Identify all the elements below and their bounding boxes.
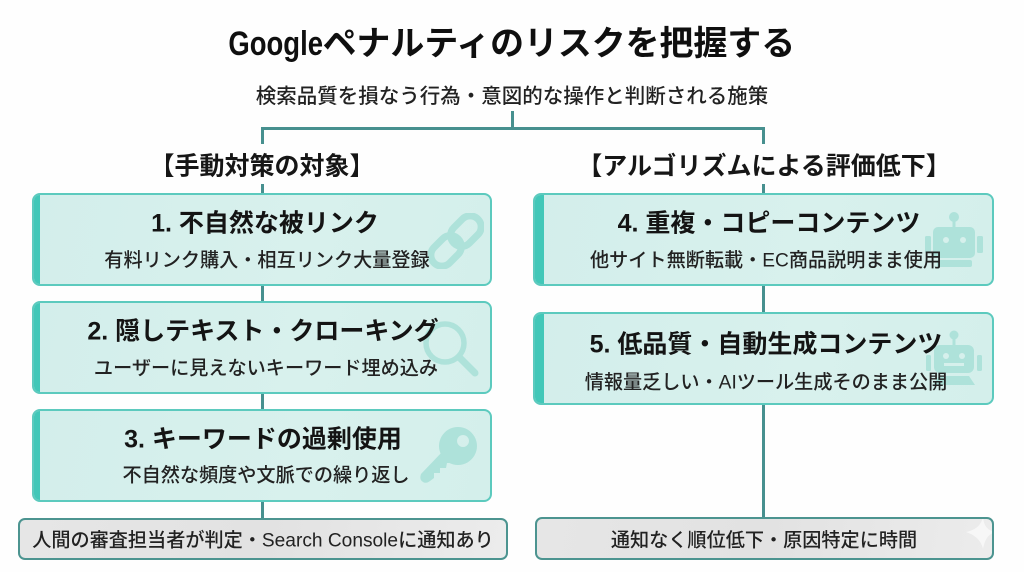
icon: robot: [925, 212, 983, 267]
icon: key: [420, 427, 477, 483]
card 5 heading: 5. 低品質・自動生成コンテンツ: [590, 330, 942, 358]
card 1 description: 有料リンク購入・相互リンク大量登録: [104, 250, 430, 271]
heading: algorithm: 【アルゴリズムによる評価低下】: [577, 152, 951, 180]
card 1 heading: 1. 不自然な被リンク: [151, 210, 379, 238]
card 3 heading: 3. キーワードの過剰使用: [124, 426, 402, 454]
callout: manual action note: [18, 518, 508, 560]
title: Google: [228, 25, 322, 63]
icon: sparkle: [967, 519, 992, 548]
card 4 description: 他サイト無断転載・EC商品説明まま使用: [590, 250, 942, 271]
card 4 heading: 4. 重複・コピーコンテンツ: [618, 210, 920, 238]
panel: card 5 low quality content: [533, 312, 994, 405]
icon: robot: [926, 330, 982, 385]
title: ペナルティのリスクを把握する: [323, 25, 795, 63]
panel: card 1 unnatural backlinks: [32, 193, 492, 286]
panel: card 2 hidden text: [32, 301, 492, 394]
card 3 description: 不自然な頻度や文脈での繰り返し: [122, 465, 410, 486]
note text: 通知なく順位低下・原因特定に時間: [611, 530, 917, 551]
card 2 description: ユーザーに見えないキーワード埋め込み: [94, 358, 438, 379]
heading: manual action: 【手動対策の対象】: [149, 152, 375, 180]
panel: card 4 duplicate content: [533, 193, 994, 286]
subtitle: 検索品質を損なう行為・意図的な操作と判断される施策: [256, 85, 768, 108]
card 5 description: 情報量乏しい・AIツール生成そのまま公開: [585, 372, 947, 393]
panel: card 3 keyword stuffing: [32, 409, 492, 502]
card 2 heading: 2. 隠しテキスト・クローキング: [87, 318, 439, 346]
icon: magnifier: [423, 321, 478, 376]
callout: algorithm note: [535, 517, 994, 560]
callout: manual action note: 人間の審査担当者が判定・Search Consoleに通知あり: [32, 530, 494, 551]
icon: chain link: [428, 213, 484, 269]
